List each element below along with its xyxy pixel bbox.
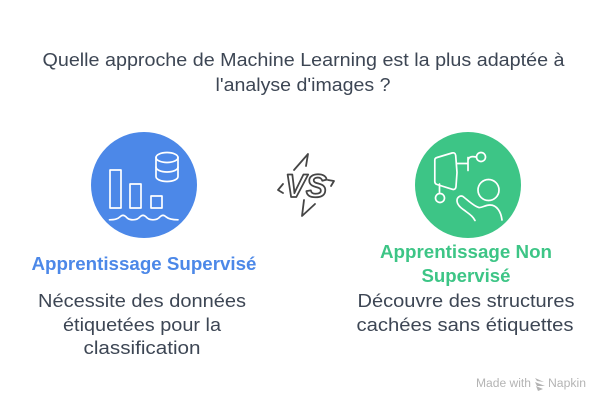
panel: apprentissage non supervisé <box>356 132 574 335</box>
watermark: made with napkin: Napkin <box>548 378 586 390</box>
text block: supervisé description <box>38 291 246 358</box>
title <box>42 50 566 95</box>
panel: apprentissage supervisé <box>32 132 256 358</box>
text block: non supervisé description: cachées sans étiquettes <box>356 315 574 335</box>
title: Quelle approche de Machine Learning est la plus adaptée à <box>42 50 566 70</box>
icon: bar chart and database on blue circle <box>91 132 197 238</box>
heading: apprentissage non supervisé: Apprentissage Non <box>380 242 552 262</box>
text block: non supervisé description: Découvre des structures <box>358 291 574 311</box>
title: l'analyse d'images ? <box>216 75 390 95</box>
icon: versus: VS <box>285 168 328 204</box>
heading: apprentissage non supervisé: Supervisé <box>422 266 510 286</box>
icon: versus <box>278 154 334 216</box>
text block: supervisé description: classification <box>84 338 200 358</box>
heading: apprentissage supervisé: Apprentissage Supervisé <box>32 254 256 274</box>
watermark: made with napkin <box>476 378 586 391</box>
text block: supervisé description: étiquetées pour la <box>63 315 222 335</box>
icon: napkin logo <box>535 378 545 391</box>
heading: apprentissage non supervisé <box>380 242 552 286</box>
watermark: made with napkin: Made with <box>476 378 531 390</box>
text block: non supervisé description <box>356 291 574 335</box>
text block: supervisé description: Nécessite des données <box>38 291 246 311</box>
icon: person and flow diagram on green circle <box>415 132 521 238</box>
